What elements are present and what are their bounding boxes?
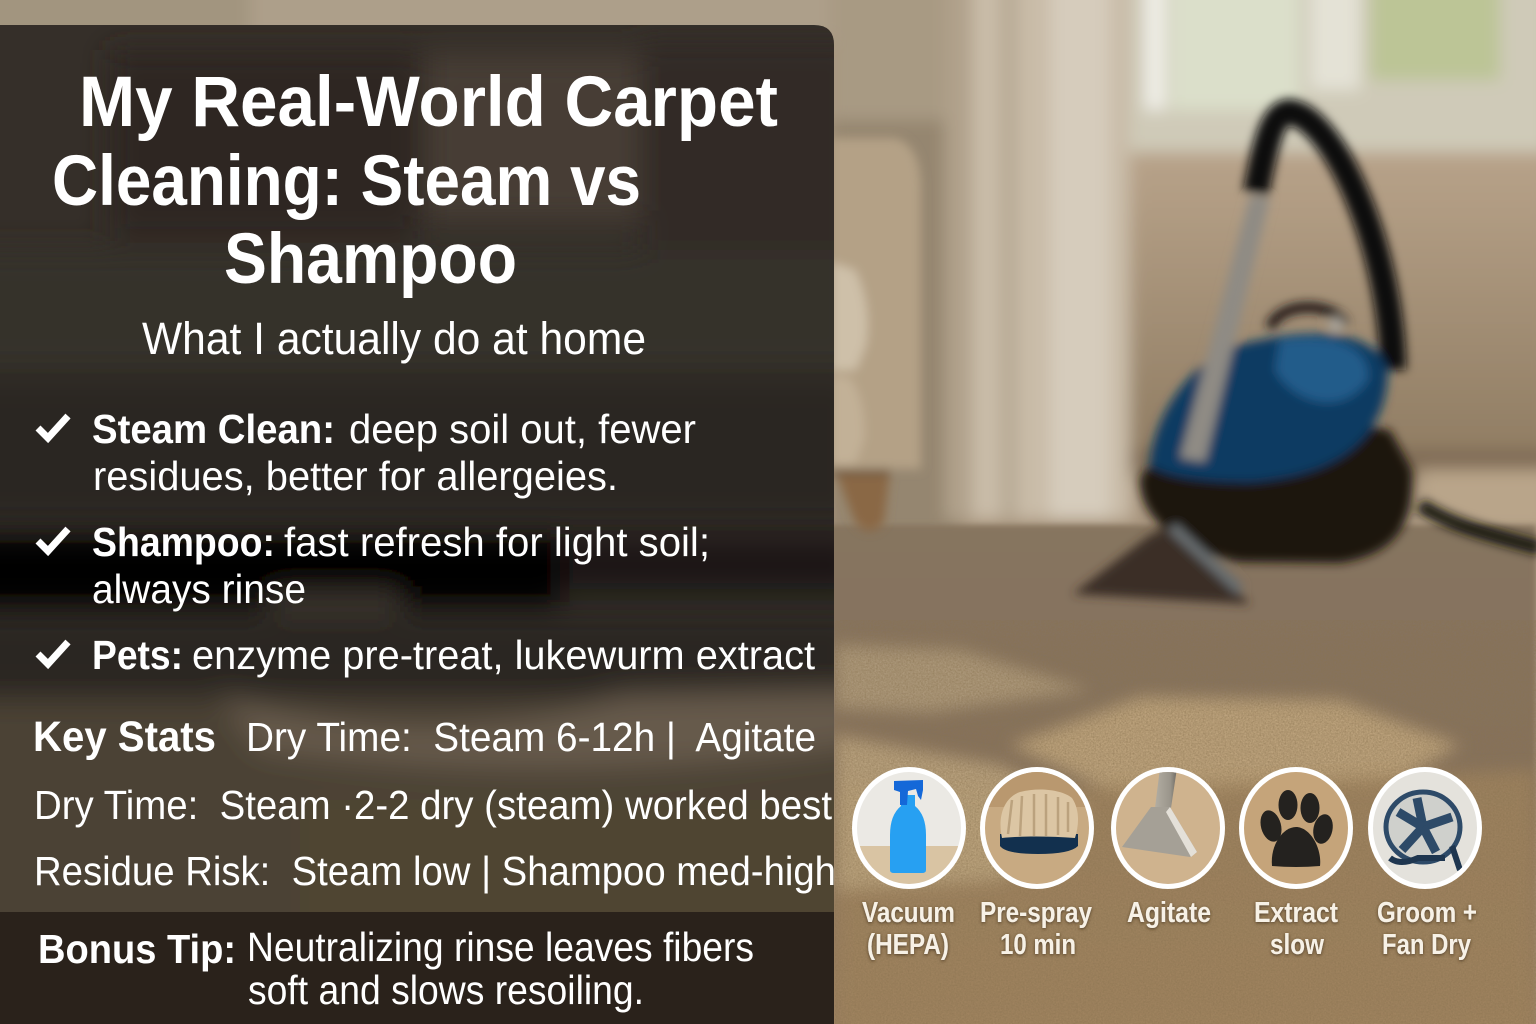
blurred sofa shapes seen through the panel: [0, 40, 860, 940]
step 1: vacuum: [850, 765, 970, 961]
wall and curtains: [830, 0, 960, 540]
armchair: [830, 138, 921, 531]
wand: [1180, 195, 1270, 462]
top strip above panel: [0, 0, 840, 40]
checklist item: shampoo: fast refresh for light soil;: [284, 519, 710, 565]
checklist item: steam clean: Steam Clean:: [92, 406, 335, 452]
title: Cleaning: Steam vs: [52, 142, 641, 221]
label: [862, 897, 955, 961]
subtitle: What I actually do at home: [142, 313, 646, 364]
dark translucent text panel: [0, 25, 860, 1024]
icon: check mark: [38, 416, 68, 438]
bonus tip: Neutralizing rinse leaves fibers: [247, 924, 754, 970]
label: 10 min: [1000, 929, 1076, 961]
label: Pre-spray: [980, 897, 1092, 929]
label: (HEPA): [867, 929, 949, 961]
icon: spray bottle: [850, 765, 970, 891]
label: slow: [1270, 929, 1324, 961]
icon: brush: [980, 765, 1095, 890]
step 4: extract: [1238, 765, 1353, 961]
key stats: Key Stats: [33, 713, 216, 761]
key stats: Dry Time: Steam ·2-2 dry (steam) worked best: [34, 782, 833, 828]
label: [980, 897, 1092, 961]
checklist item: pets: Pets:: [92, 632, 183, 678]
checklist item: shampoo: always rinse: [92, 566, 306, 612]
step 3: agitate: [1110, 765, 1225, 929]
bonus tip: soft and slows resoiling.: [248, 967, 644, 1013]
icon: extractor nozzle: [1110, 765, 1225, 890]
title: Shampoo: [224, 220, 517, 299]
checklist item: steam clean: deep soil out, fewer: [349, 406, 696, 452]
checklist item: pets: enzyme pre-treat, lukewurm extract: [192, 632, 816, 678]
icon: paw print: [1238, 765, 1353, 890]
bonus tip band: [0, 912, 834, 1024]
title: My Real-World Carpet: [79, 63, 778, 142]
checklist item: steam clean: [38, 406, 696, 499]
label: Fan Dry: [1382, 929, 1471, 961]
label: Groom +: [1377, 897, 1477, 929]
icon: check mark: [38, 529, 68, 551]
label: Agitate: [1127, 897, 1211, 929]
icon: fan: [1368, 765, 1483, 890]
bonus tip: [38, 924, 754, 1013]
label: [1254, 897, 1338, 961]
step 2: pre-spray: [980, 765, 1095, 961]
icon: check mark: [38, 642, 68, 664]
vacuum cleaner: [1073, 112, 1536, 604]
key stats: Residue Risk: Steam low | Shampoo med-high: [34, 848, 836, 894]
checklist item: shampoo: [38, 519, 710, 612]
key stats: [33, 713, 836, 894]
key stats: Dry Time: Steam 6-12h | Agitate: [246, 714, 816, 760]
checklist item: steam clean: residues, better for allergeies.: [93, 453, 618, 499]
step 5: groom and fan dry: [1368, 765, 1483, 961]
title: [52, 63, 778, 299]
bonus tip: Bonus Tip:: [38, 926, 236, 972]
checklist item: shampoo: Shampoo:: [92, 519, 275, 565]
label: Vacuum: [862, 897, 955, 929]
label: Extract: [1254, 897, 1338, 929]
label: [1377, 897, 1477, 961]
carpet base: [0, 525, 1536, 1024]
